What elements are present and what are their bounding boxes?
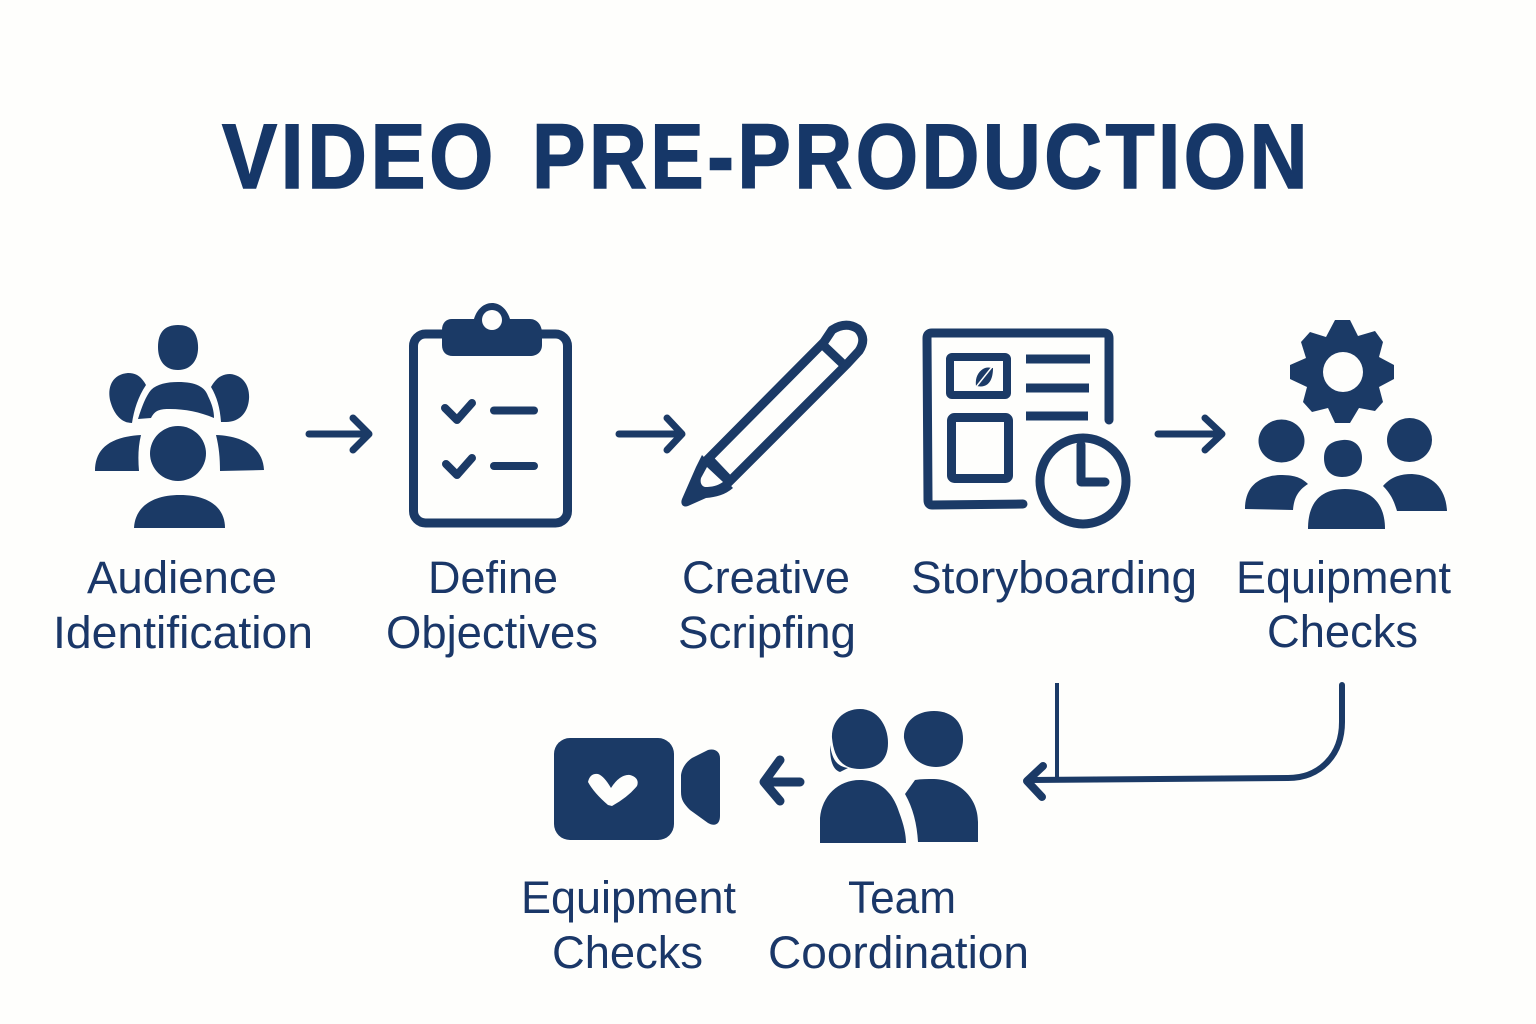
icon: team coordination (820, 709, 978, 843)
label: storyboarding: Storyboarding (911, 552, 1197, 603)
label: equipment checks (second row) (521, 872, 736, 978)
icon: audience group (95, 325, 264, 528)
arrow: team to camera (764, 760, 800, 801)
label: team coordination: Team (848, 872, 956, 923)
arrow: storyboard to equipment (1158, 418, 1222, 450)
title (222, 106, 1311, 208)
icon: video camera with check (554, 738, 720, 840)
label: equipment checks: Checks (1267, 606, 1418, 657)
arrow: connector from equipment checks to team (1027, 683, 1342, 797)
label: creative scripfing: Creative (682, 552, 850, 603)
label: equipment checks (second row): Checks (552, 927, 703, 978)
title: VIDEO (222, 106, 497, 208)
icon: pencil (681, 325, 863, 507)
icon: storyboard with clock (927, 333, 1126, 524)
label: audience identification: Audience (87, 552, 277, 603)
icon: clipboard checklist (414, 303, 568, 523)
arrow: objectives to scripting (619, 418, 682, 450)
label: define objectives: Objectives (386, 607, 598, 658)
icon: gear with team (1245, 320, 1447, 529)
title: PRE-PRODUCTION (532, 106, 1311, 208)
label: team coordination (768, 872, 1029, 978)
label: creative scripfing: Scripfing (678, 607, 856, 658)
label: equipment checks: Equipment (1236, 552, 1451, 603)
label: team coordination: Coordination (768, 927, 1029, 978)
label: equipment checks (second row): Equipment (521, 872, 736, 923)
label: equipment checks (1236, 552, 1451, 657)
arrow: audience to objectives (309, 418, 369, 450)
label: creative scripfing (678, 552, 856, 658)
label: define objectives (386, 552, 598, 658)
label: audience identification: Identification (53, 607, 313, 658)
label: audience identification (53, 552, 313, 658)
label: define objectives: Define (428, 552, 558, 603)
